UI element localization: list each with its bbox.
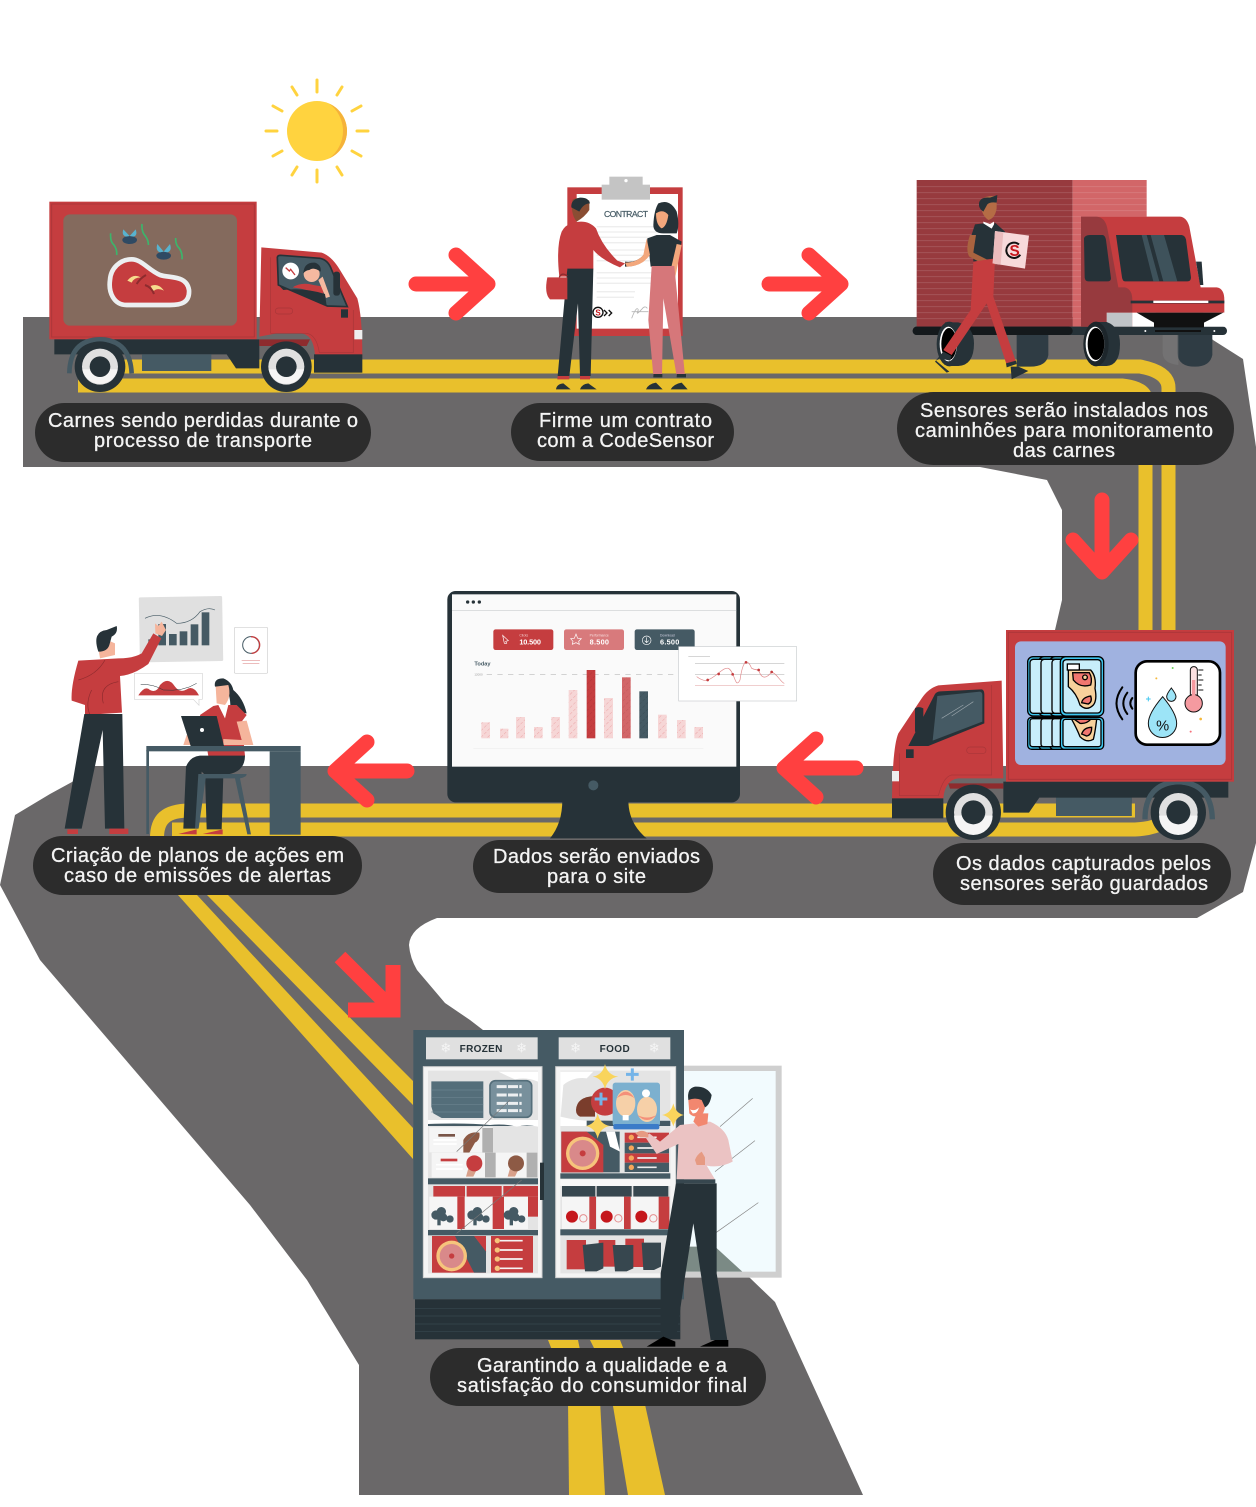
step label 2 — [511, 403, 734, 461]
speech bubble chart — [134, 673, 202, 705]
icon: spoiled meat — [110, 224, 189, 305]
step label 7 — [430, 1348, 766, 1406]
dashboard stat cards: Download — [660, 634, 675, 638]
frozen food display fridge — [413, 1030, 782, 1347]
icon: meat sensor cards — [1028, 657, 1104, 749]
contract handshake — [546, 177, 688, 389]
standing man — [65, 622, 166, 834]
businessman — [546, 198, 625, 389]
step label 3 — [897, 392, 1234, 465]
delivery man with box: S — [1010, 243, 1020, 260]
step label 1: processo de transporte — [94, 430, 312, 452]
cargo box with shutter — [917, 180, 1147, 327]
arrow 3 — [1073, 500, 1131, 572]
report card — [234, 627, 268, 673]
arrow 5 — [335, 742, 407, 800]
step label 4: Os dados capturados pelos — [956, 853, 1211, 875]
step label 5 — [473, 840, 713, 893]
dashboard stat cards: 10.500 — [519, 638, 541, 647]
step label 7: Garantindo a qualidade e a — [477, 1355, 728, 1377]
chassis — [913, 327, 1227, 367]
icon: sun — [266, 80, 368, 182]
arrow 1 — [416, 255, 488, 313]
step label 6: Criação de planos de ações em — [51, 845, 344, 867]
open door — [661, 1050, 782, 1278]
food package with sparkles — [585, 1064, 684, 1139]
monitor — [447, 591, 740, 838]
dashboard stat cards — [493, 629, 695, 650]
step label 6: caso de emissões de alertas — [64, 865, 331, 887]
cargo box — [49, 202, 257, 339]
dashboard stat cards: 6.500 — [660, 638, 679, 647]
arrow 6 — [340, 957, 393, 1010]
step label 1: Carnes sendo perdidas durante o — [48, 410, 358, 432]
chassis — [54, 339, 259, 373]
cargo box — [1006, 630, 1234, 782]
step label 3: caminhões para monitoramento — [915, 420, 1213, 442]
team planning actions — [65, 596, 301, 835]
wheels — [75, 341, 312, 392]
road markings — [78, 366, 1168, 1495]
wheels — [946, 785, 1206, 840]
step label 5: para o site — [547, 866, 646, 888]
icon: humidity and temperature card — [1136, 661, 1220, 745]
dashboard bar chart — [473, 661, 703, 749]
truck: meat being lost — [49, 202, 362, 392]
icon: signal — [1116, 687, 1132, 719]
fridge cabinet: ❄ — [649, 1042, 660, 1057]
step label 6 — [33, 836, 362, 895]
line chart panel — [679, 647, 797, 701]
step label 3: das carnes — [1013, 440, 1115, 462]
road — [0, 317, 1256, 1495]
frozen shelves — [428, 1072, 538, 1273]
fridge cabinet: FROZEN — [460, 1044, 502, 1055]
icon: humidity and temperature card: % — [1156, 719, 1169, 735]
clipboard: S — [595, 308, 601, 317]
step label 4: sensores serão guardados — [960, 873, 1208, 895]
seated woman — [178, 678, 253, 834]
step label 2: Firme um contrato — [539, 410, 712, 432]
clipboard — [567, 177, 683, 336]
cab — [1081, 217, 1224, 332]
step label 2: com a CodeSensor — [537, 430, 714, 452]
fridge cabinet: FOOD — [600, 1044, 630, 1055]
dashboard bar chart: 12000 — [474, 673, 483, 677]
fridge cabinet: ❄ — [570, 1042, 581, 1057]
truck: sensors installed — [913, 180, 1227, 379]
step label 1 — [35, 403, 371, 462]
clipboard: CONTRACT — [604, 209, 649, 219]
arrow 4 — [784, 739, 856, 797]
businesswoman — [625, 202, 688, 389]
arrow 2 — [769, 255, 841, 313]
desk — [146, 746, 301, 835]
food shelves — [560, 1072, 670, 1271]
step label 3: Sensores serão instalados nos — [920, 400, 1208, 422]
cab — [892, 681, 1003, 818]
dashboard bar chart: Today — [474, 661, 491, 667]
step label 4 — [933, 843, 1231, 905]
cab — [259, 247, 362, 373]
fridge cabinet: ❄ — [440, 1042, 452, 1057]
man presenting the food package — [635, 1087, 733, 1347]
step label 7: satisfação do consumidor final — [457, 1375, 747, 1397]
delivery man with box — [935, 195, 1029, 379]
dashboard stat cards: Clicks — [519, 634, 529, 638]
step label 5: Dados serão enviados — [493, 846, 700, 868]
chart board — [139, 596, 223, 662]
chassis — [1003, 782, 1228, 819]
wheels — [937, 322, 1120, 366]
computer monitor with dashboard — [447, 591, 797, 838]
fridge cabinet: ❄ — [516, 1042, 527, 1057]
truck: data stored — [892, 630, 1234, 840]
dashboard stat cards: 8.500 — [590, 638, 609, 647]
fridge cabinet — [413, 1030, 684, 1339]
dashboard stat cards: Performance — [590, 634, 609, 638]
